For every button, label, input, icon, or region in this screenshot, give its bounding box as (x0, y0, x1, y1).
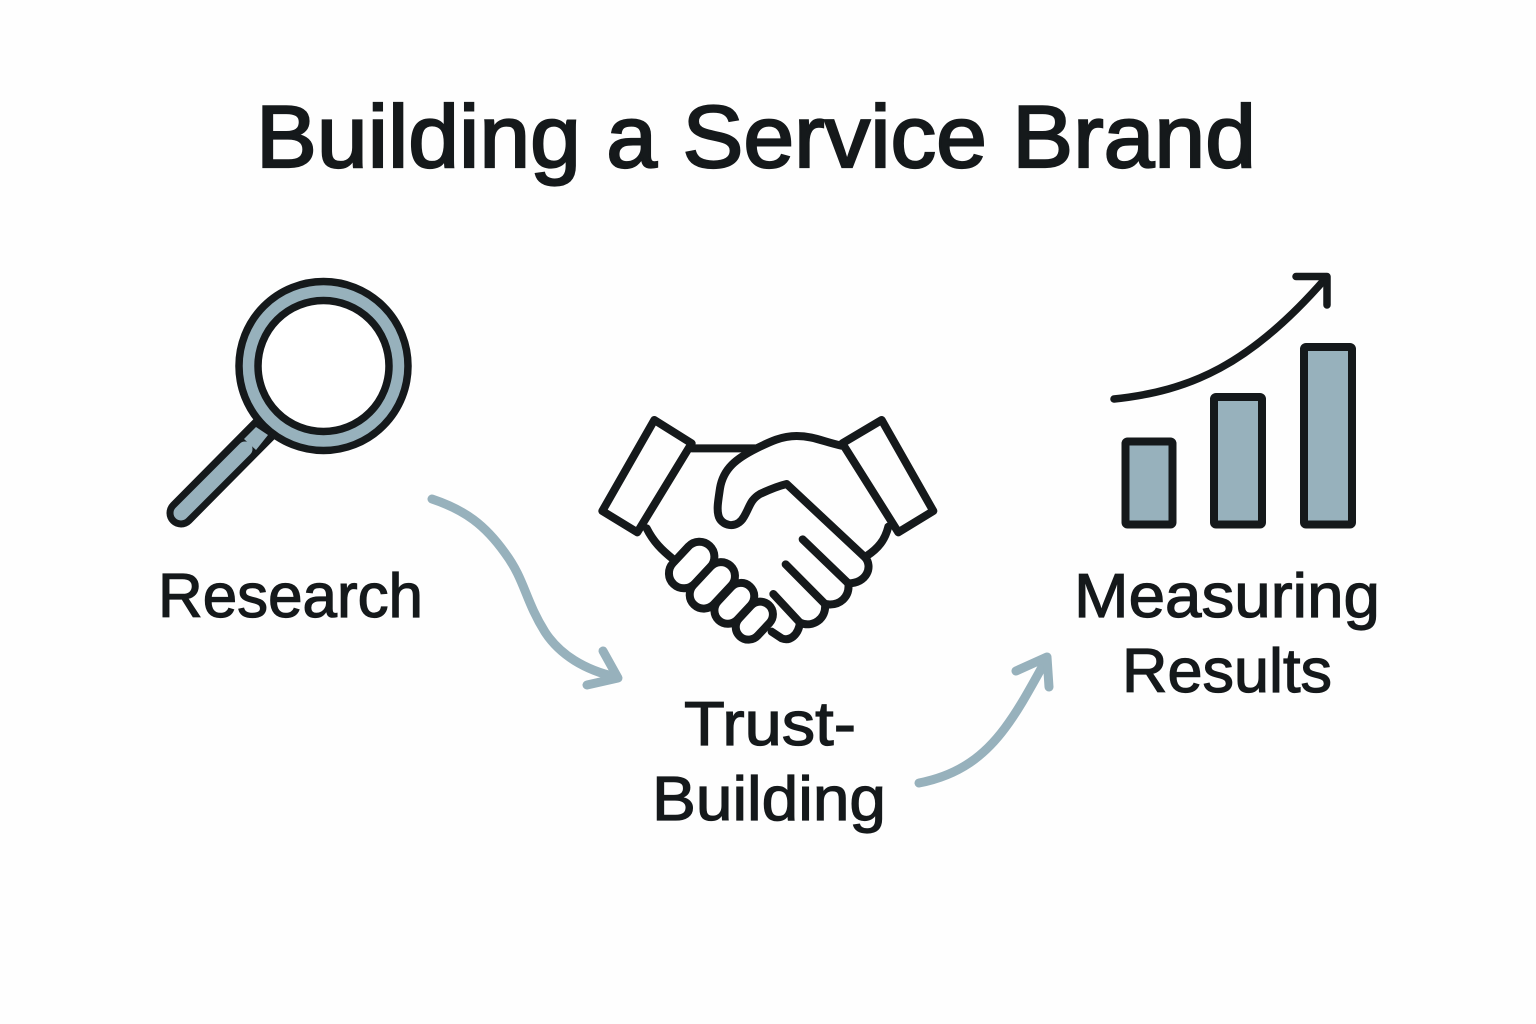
right cuff (842, 420, 933, 532)
finger lines (773, 539, 848, 623)
knuckle 4 (731, 596, 778, 645)
bar 2 (1214, 397, 1262, 524)
label: Trust-Building: Building (652, 765, 886, 834)
left cuff (602, 420, 692, 532)
icon: handshake (602, 420, 933, 645)
knuckle 3 (709, 577, 760, 629)
knuckle 2 (684, 556, 741, 614)
title: Building a Service Brand (256, 87, 1256, 186)
right wrist (867, 527, 888, 556)
bar 3 (1304, 347, 1352, 524)
label: Measuring Results: Results (1122, 637, 1332, 706)
left wrist (647, 528, 673, 559)
arrow: research to trust-building (432, 499, 618, 685)
label: Trust-Building: Trust- (684, 690, 856, 759)
label: Measuring Results: Measuring (1074, 562, 1380, 631)
label: Research: Research (158, 562, 423, 631)
top of left hand (692, 436, 755, 460)
rising arrow (1114, 276, 1327, 399)
label: Trust-Building (652, 690, 886, 834)
icon: bar chart with rising arrow (1114, 276, 1352, 524)
right hand with thumb and fingers (718, 436, 869, 639)
arrow: trust-building to measuring results (919, 657, 1049, 783)
label: Measuring Results (1074, 562, 1380, 706)
knuckle 1 (663, 536, 721, 594)
bar 1 (1126, 442, 1172, 524)
icon: magnifying glass (181, 282, 408, 513)
